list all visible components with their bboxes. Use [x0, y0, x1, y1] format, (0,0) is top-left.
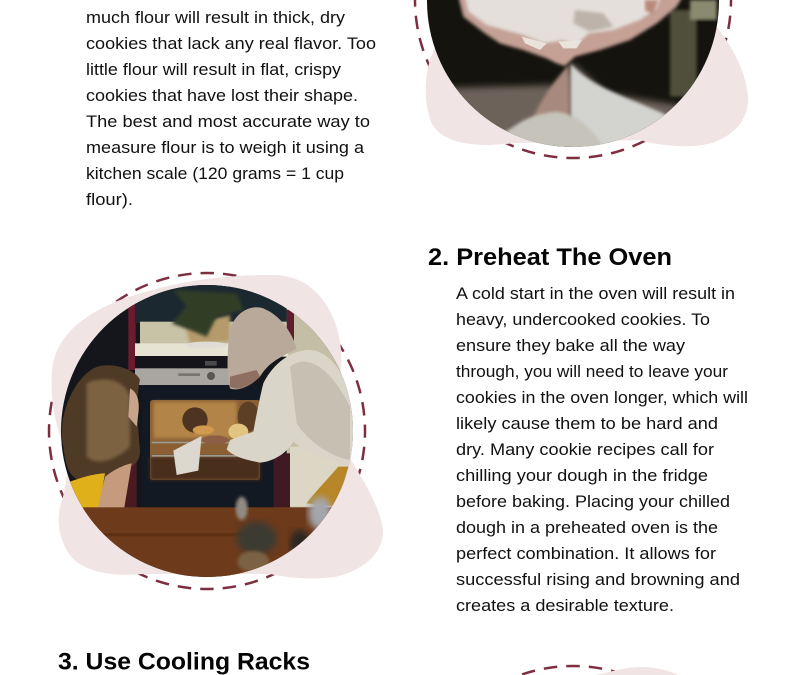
text block: step 2 oven description: cookies in the oven longer, which will: [456, 388, 748, 407]
text block: step 2 oven description: chilling your dough in the fridge: [456, 466, 708, 485]
panel: step 1 flour photo: [415, 0, 748, 158]
text block: step 2 oven description: through, you will need to leave your: [456, 362, 728, 381]
text block: step 2 oven description: dry. Many cookie recipes call for: [456, 440, 714, 459]
text block: step 1 flour description: measure flour is to weigh it using a: [86, 138, 365, 157]
text block: step 1 flour description: The best and most accurate way to: [86, 112, 370, 131]
pink blob behind flour photo: [426, 5, 748, 146]
text block: step 1 flour description: much flour will result in thick, dry: [86, 8, 346, 27]
pink blob, step 3: [596, 667, 678, 675]
text block: step 2 oven description: [456, 284, 748, 615]
panel: step 3 photo top edge: [520, 666, 678, 675]
text block: step 1 flour description: [86, 8, 376, 209]
text block: step 2 oven description: heavy, undercooked cookies. To: [456, 310, 710, 329]
text block: step 2 oven description: successful rising and browning and: [456, 570, 740, 589]
text block: step 2 oven description: ensure they bake all the way: [456, 336, 686, 355]
text block: step 2 oven description: before baking. Placing your chilled: [456, 492, 730, 511]
text block: step 2 oven description: perfect combination. It allows for: [456, 544, 716, 563]
text block: step 2 oven description: A cold start in the oven will result in: [456, 284, 735, 303]
text block: step 2 oven description: creates a desirable texture.: [456, 596, 674, 615]
text block: step 1 flour description: flour).: [86, 190, 133, 209]
text block: step 1 flour description: cookies that have lost their shape.: [86, 86, 358, 105]
dashed ring around flour photo: [415, 0, 731, 158]
text block: step 1 flour description: kitchen scale (120 grams = 1 cup: [86, 164, 344, 183]
dashed ring around oven photo: [49, 273, 365, 589]
photo: hands holding flour: [423, 0, 723, 148]
pink blob behind oven photo: [52, 275, 383, 578]
text block: step 2 oven description: likely cause them to be hard and: [456, 414, 718, 433]
heading: step 3: 3. Use Cooling Racks: [58, 648, 310, 675]
text block: step 1 flour description: little flour will result in flat, crispy: [86, 60, 342, 79]
text block: step 2 oven description: dough in a preheated oven is the: [456, 518, 718, 537]
panel: step 2 oven photo: [49, 273, 383, 589]
heading: step 2: 2. Preheat The Oven: [428, 244, 672, 271]
dashed ring, step 3: [520, 666, 626, 675]
text block: step 1 flour description: cookies that lack any real flavor. Too: [86, 34, 376, 53]
photo: woman and girl at the oven: [60, 283, 357, 581]
